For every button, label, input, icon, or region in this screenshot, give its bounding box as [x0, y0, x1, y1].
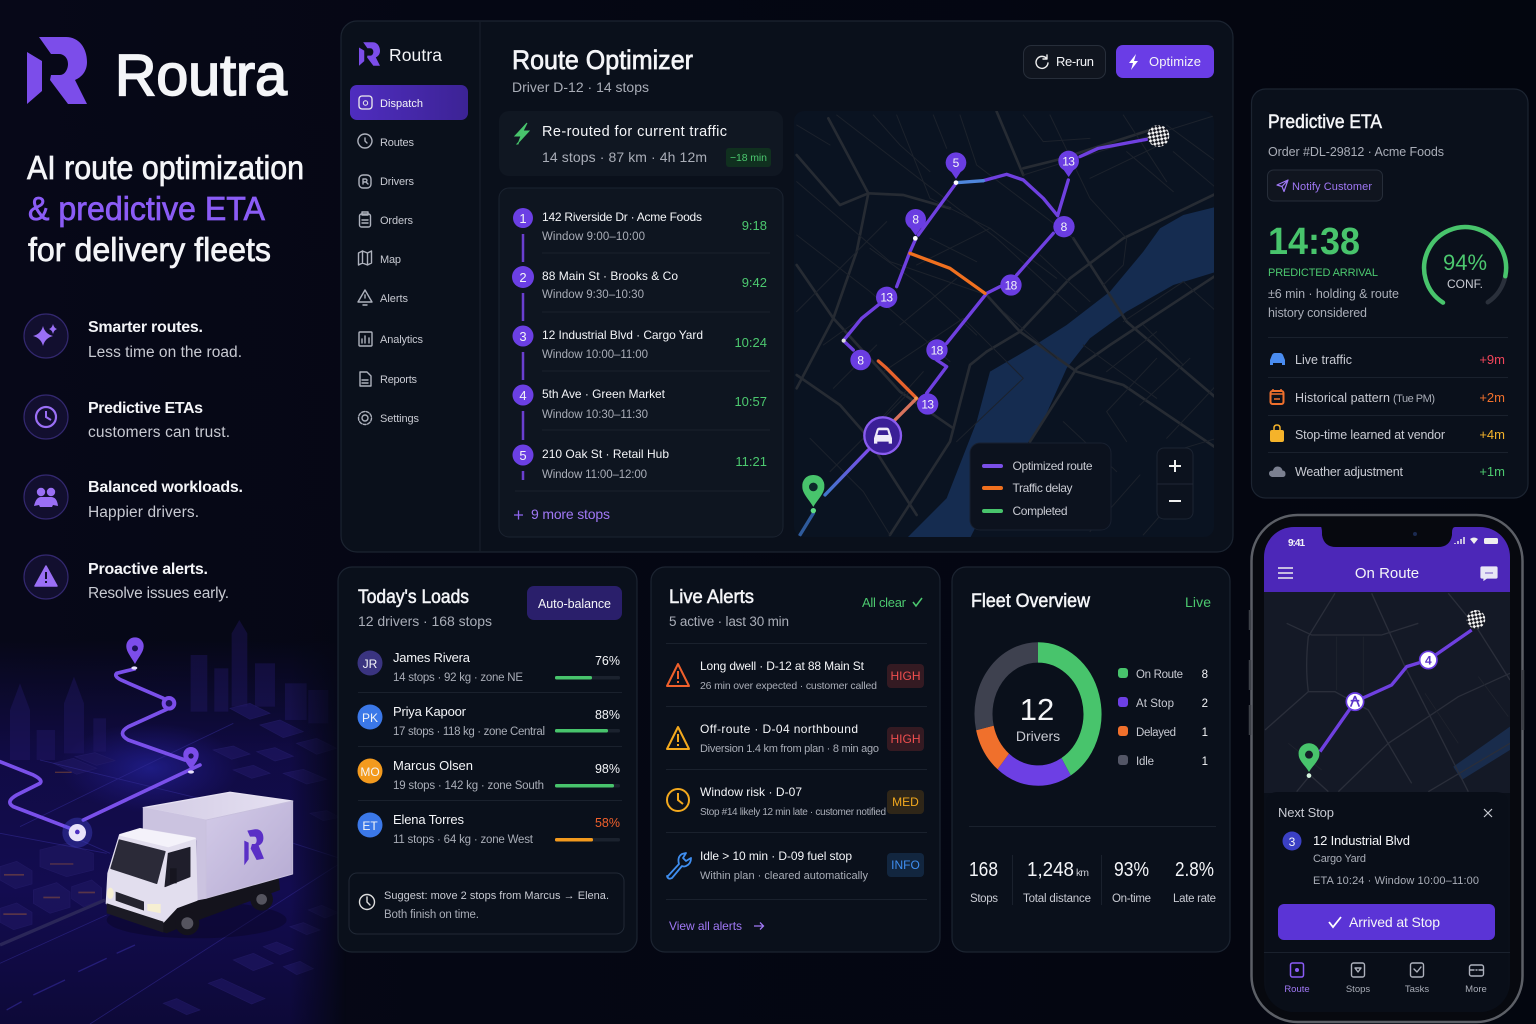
button: optimize [1116, 45, 1214, 78]
stat: late rate: Late rate [1173, 893, 1216, 905]
next stop sheet [1264, 792, 1510, 1012]
more stops link: 9 more stops [531, 506, 610, 522]
stop 3: 12 Industrial Blvd · Cargo Yard [542, 328, 703, 342]
alert: idle: INFO [891, 858, 920, 872]
sidebar logo: Routra [389, 45, 442, 65]
stat: late rate [1173, 859, 1216, 905]
sidebar navigation [358, 134, 424, 425]
factor: weather adjustment [1269, 464, 1505, 479]
headline [27, 149, 304, 268]
headline: AI route optimization [27, 149, 304, 186]
factor: historical pattern: Historical pattern [1295, 391, 1390, 405]
stop 3 [542, 328, 767, 361]
phone tab bar: Stops [1346, 984, 1370, 995]
alert: window risk: Stop #14 likely 12 min late · customer notified [700, 807, 886, 818]
predicted arrival time: history considered [1268, 306, 1367, 320]
phone tab bar: More [1465, 984, 1487, 995]
brand logo [27, 37, 288, 108]
illustration: city, route and delivery truck [0, 620, 346, 1024]
route line [0, 669, 200, 828]
factor: live traffic: Live traffic [1295, 353, 1352, 367]
finish flag [1147, 125, 1169, 147]
driver: Marcus Olsen [358, 758, 620, 792]
map: 13 [880, 291, 893, 305]
feature: balanced workloads: Happier drivers. [88, 504, 199, 521]
donut legend: 8 [1202, 669, 1208, 681]
factor: live traffic [1270, 352, 1505, 367]
feature: proactive alerts: Proactive alerts. [88, 561, 208, 578]
factor: stop-time learned: Stop-time learned at vendor [1295, 428, 1445, 442]
donut legend: 1 [1202, 727, 1208, 739]
feature: balanced workloads [24, 475, 243, 521]
stat: stops [969, 859, 998, 905]
callout: rebalance suggestion: Both finish on time. [384, 909, 479, 921]
stop 1: 142 Riverside Dr · Acme Foods [542, 210, 702, 224]
stop 4: 10:57 [734, 394, 767, 409]
header title: On Route [1355, 565, 1419, 582]
stat: stops: Stops [970, 893, 998, 905]
next stop sheet: 3 [1289, 835, 1296, 849]
donut legend: Delayed [1136, 727, 1176, 739]
donut legend: 2 [1202, 698, 1208, 710]
stat: total distance: km [1076, 867, 1089, 879]
map: 18 [1005, 278, 1018, 292]
link: view all alerts: View all alerts [669, 919, 742, 933]
stat: total distance: Total distance [1023, 893, 1091, 905]
next stop sheet: ETA 10:24 · Window 10:00–11:00 [1313, 875, 1479, 887]
status: all clear: All clear [862, 595, 907, 610]
phone tab bar: Tasks [1405, 984, 1429, 995]
phone app header [1264, 527, 1510, 593]
feature: predictive ETAs: customers can trust. [88, 424, 230, 441]
page heading: Driver D-12 · 14 stops [512, 79, 649, 95]
alert: long dwell: Long dwell · D-12 at 88 Main St [700, 659, 865, 673]
map legend: Completed [1012, 504, 1068, 518]
driver: James Rivera [358, 650, 620, 684]
driver: Priya Kapoor: 17 stops · 118 kg · zone Central [393, 726, 545, 738]
button: auto-balance [527, 586, 622, 620]
sidebar navigation: Alerts [380, 293, 408, 305]
stat: late rate: 2.8% [1175, 859, 1214, 881]
alert: off-route: Off-route · D-04 northbound [700, 722, 858, 736]
phone notch [1320, 525, 1455, 547]
feature: smarter routes [24, 314, 242, 361]
feature: predictive ETAs [24, 395, 230, 441]
factor: live traffic: +9m [1479, 352, 1505, 367]
phone map: 4 [1425, 654, 1432, 668]
button: notify customer: Notify Customer [1292, 181, 1372, 193]
sidebar navigation: Map [380, 254, 401, 266]
phone tab bar [1284, 963, 1487, 995]
confidence gauge: 94% [1443, 250, 1487, 275]
driver: Marcus Olsen: 98% [595, 762, 620, 776]
confidence gauge [1424, 227, 1506, 303]
driver: James Rivera: James Rivera [393, 650, 471, 665]
alert: long dwell: HIGH [890, 669, 920, 683]
route pins [62, 637, 199, 848]
stop 1: 9:18 [742, 218, 767, 233]
driver: James Rivera: 14 stops · 92 kg · zone NE [393, 672, 523, 684]
card: stop list: 1 [519, 211, 527, 226]
alert: long dwell: 26 min over expected · customer called [700, 680, 877, 692]
alert: window risk: Window risk · D-07 [700, 785, 802, 799]
alert: window risk [667, 785, 924, 818]
next stop sheet: Cargo Yard [1313, 853, 1366, 865]
panel: predictive ETA [1252, 89, 1528, 498]
alert: off-route: Diversion 1.4 km from plan · 8 min ago [700, 743, 879, 755]
feature: predictive ETAs: Predictive ETAs [88, 400, 203, 417]
donut chart [983, 652, 1092, 776]
driver: Priya Kapoor: PK [362, 711, 378, 725]
map zoom controls [1157, 448, 1193, 519]
map legend [970, 443, 1111, 530]
alert: off-route [667, 722, 924, 755]
truck [107, 792, 293, 938]
stat: on-time: On-time [1112, 893, 1151, 905]
status bar: 9:41 [1288, 538, 1305, 549]
river [907, 207, 1217, 538]
driver: Elena Torres: 11 stops · 64 kg · zone West [393, 834, 534, 846]
phone tab bar: Route [1284, 984, 1310, 995]
factor: historical pattern [1270, 389, 1505, 405]
phone mockup [1250, 515, 1523, 1022]
callout: rebalance suggestion [349, 873, 624, 934]
map legend: Traffic delay [1012, 481, 1072, 495]
factor: stop-time learned [1270, 425, 1505, 442]
feature: balanced workloads: Balanced workloads. [88, 479, 243, 496]
feature: proactive alerts: Resolve issues early. [88, 585, 229, 602]
sidebar navigation: Orders [380, 215, 414, 227]
stop 5: 11:21 [735, 454, 767, 469]
driver: Priya Kapoor [358, 704, 620, 738]
driver: James Rivera: 76% [595, 654, 620, 668]
map: 13 [921, 397, 934, 411]
sidebar active item: dispatch [350, 85, 468, 120]
menu icon [1278, 568, 1293, 578]
stat: total distance [1023, 859, 1091, 905]
factor: historical pattern: (Tue PM) [1393, 393, 1435, 405]
panel: fleet overview: Live [1185, 594, 1211, 610]
predicted arrival time [1268, 221, 1399, 320]
sidebar navigation: Routes [380, 137, 414, 149]
stop 2: 9:42 [742, 275, 767, 290]
alert: long dwell [667, 659, 924, 692]
card: stop list: 3 [519, 329, 527, 344]
button: optimize: Optimize [1149, 54, 1201, 69]
sidebar navigation: Analytics [380, 334, 424, 346]
map: 8 [1061, 220, 1068, 234]
stop 5: Window 11:00–12:00 [542, 469, 647, 481]
map: 18 [931, 343, 944, 357]
button: auto-balance: Auto-balance [538, 597, 611, 611]
alert: idle: Within plan · cleared automatically [700, 870, 868, 882]
stat: on-time: 93% [1114, 859, 1149, 881]
stat: stops: 168 [969, 859, 998, 881]
factor: stop-time learned: +4m [1479, 427, 1505, 442]
map: 5 [953, 156, 960, 170]
panel: route optimizer dashboard [338, 21, 1528, 1022]
panel: predictive ETA: Predictive ETA [1268, 112, 1382, 133]
alert: window risk: MED [892, 795, 919, 809]
card: re-route summary: Re-routed for current traffic [542, 124, 727, 140]
stop 3: Window 10:00–11:00 [542, 349, 648, 361]
map [794, 111, 1217, 538]
predicted arrival time: 14:38 [1268, 221, 1360, 263]
origin pin [802, 475, 824, 513]
donut legend: On Route [1136, 669, 1183, 681]
brand logo: Routra [115, 43, 288, 108]
alert: idle [667, 849, 924, 882]
panel: live alerts [651, 567, 940, 952]
stop 2 [542, 269, 767, 301]
panel: live alerts: 5 active · last 30 min [669, 614, 789, 629]
driver: Marcus Olsen: 19 stops · 142 kg · zone South [393, 780, 544, 792]
panel: today's loads [338, 567, 637, 952]
button: notify customer [1268, 170, 1382, 201]
panel: today's loads: 12 drivers · 168 stops [358, 613, 492, 629]
sidebar navigation: Settings [380, 413, 420, 425]
sidebar navigation: Drivers [380, 176, 414, 188]
driver: Marcus Olsen: MO [360, 765, 380, 779]
predicted arrival time: PREDICTED ARRIVAL [1268, 267, 1378, 279]
panel: predictive ETA: Order #DL-29812 · Acme Foods [1268, 145, 1444, 159]
feature: smarter routes: Smarter routes. [88, 319, 203, 336]
confidence gauge: CONF. [1447, 277, 1483, 291]
button: arrived at stop [1278, 904, 1495, 940]
factor: historical pattern: +2m [1479, 390, 1505, 405]
callout: rebalance suggestion: Suggest: move 2 stops from Marcus → Elena. [384, 890, 609, 902]
sidebar active item: dispatch: Dispatch [380, 98, 423, 110]
next stop sheet: Next Stop [1278, 805, 1334, 820]
driver: Priya Kapoor: 88% [595, 708, 620, 722]
sidebar navigation: Reports [380, 374, 418, 386]
page heading [512, 45, 693, 95]
factor: weather adjustment: Weather adjustment [1295, 465, 1404, 479]
stop 4: Window 10:30–11:30 [542, 409, 648, 421]
stop 1: Window 9:00–10:00 [542, 231, 645, 243]
button: re-run [1024, 46, 1106, 78]
predicted arrival time: ±6 min · holding & route [1268, 287, 1399, 301]
stop 3: 10:24 [734, 335, 767, 350]
next stop sheet: 12 Industrial Blvd [1313, 833, 1410, 848]
headline: for delivery fleets [28, 231, 271, 268]
donut legend: Idle [1136, 756, 1154, 768]
donut legend [1118, 668, 1208, 768]
card: stop list [499, 188, 783, 537]
donut chart: 12 [1020, 692, 1054, 727]
card: re-route summary: −18 min [730, 152, 767, 164]
map: 8 [857, 353, 864, 367]
driver: Elena Torres: ET [362, 819, 378, 833]
button: re-run: Re-run [1056, 54, 1094, 69]
card: re-route summary: 14 stops · 87 km · 4h 12m [542, 149, 707, 165]
stop 2: Window 9:30–10:30 [542, 289, 644, 301]
alert: off-route: HIGH [890, 732, 920, 746]
page heading: Route Optimizer [512, 45, 693, 75]
feature: proactive alerts [24, 555, 229, 602]
map: 8 [912, 213, 919, 227]
donut legend: At Stop [1136, 698, 1174, 710]
driver: Elena Torres: 58% [595, 816, 620, 830]
driver: Priya Kapoor: Priya Kapoor [393, 704, 467, 719]
stop 1 [542, 210, 767, 243]
card: stop list: 5 [519, 448, 527, 463]
alert: idle: Idle > 10 min · D-09 fuel stop [700, 849, 852, 863]
driver: Elena Torres [358, 812, 620, 846]
stop 4 [542, 387, 767, 421]
stop 2: 88 Main St · Brooks & Co [542, 269, 678, 283]
card: stop list: 4 [519, 388, 527, 403]
donut chart: Drivers [1016, 728, 1060, 744]
headline: & predictive ETA [28, 190, 265, 227]
driver: James Rivera: JR [363, 657, 378, 671]
panel: live alerts: Live Alerts [669, 587, 754, 608]
panel: fleet overview: Fleet Overview [971, 591, 1090, 612]
map: 13 [1062, 154, 1075, 168]
map legend: Optimized route [1012, 459, 1093, 473]
status bar [1288, 537, 1498, 549]
chat icon [1480, 566, 1498, 582]
factor: weather adjustment: +1m [1479, 464, 1505, 479]
donut legend: 1 [1202, 756, 1208, 768]
stat: total distance: 1,248 [1027, 859, 1074, 881]
panel: today's loads: Today's Loads [358, 587, 469, 608]
phone map [1264, 592, 1510, 793]
route overlay [800, 139, 1147, 535]
driver: Elena Torres: Elena Torres [393, 812, 464, 827]
sidebar logo [359, 42, 442, 66]
panel: fleet overview [952, 567, 1230, 952]
route stop markers [850, 151, 1079, 415]
stop 5 [542, 447, 767, 481]
feature list [24, 314, 243, 602]
driver: Marcus Olsen: Marcus Olsen [393, 758, 473, 773]
button: arrived at stop: Arrived at Stop [1349, 914, 1440, 930]
card: stop list: 2 [519, 270, 527, 285]
feature: smarter routes: Less time on the road. [88, 344, 242, 361]
current vehicle marker [864, 417, 901, 454]
card: re-route summary [499, 111, 783, 176]
stop 5: 210 Oak St · Retail Hub [542, 447, 669, 461]
stat: on-time [1112, 859, 1151, 905]
stop 4: 5th Ave · Green Market [542, 387, 666, 401]
